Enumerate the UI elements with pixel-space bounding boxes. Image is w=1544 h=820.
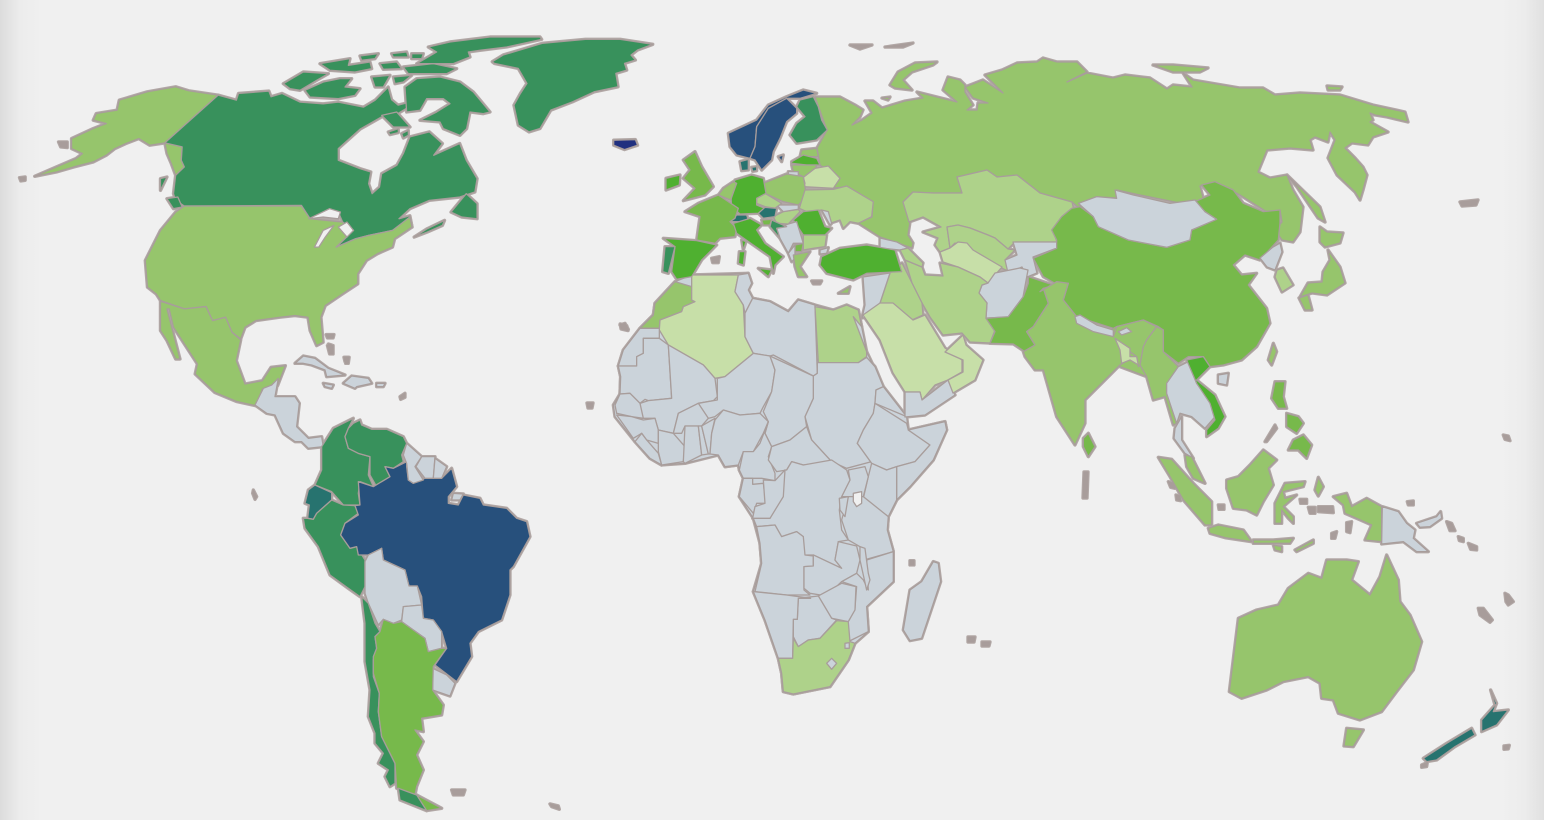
Mongolia <box>1078 190 1217 247</box>
Central America <box>255 378 323 448</box>
Belarus <box>803 166 840 188</box>
Venezuela <box>345 420 407 487</box>
New Siberian Islands <box>1327 86 1342 90</box>
Alaska panhandle <box>165 143 184 175</box>
Brazil <box>341 462 530 682</box>
United Kingdom <box>683 152 713 201</box>
small islands: Canaries, Comoros <box>620 323 914 565</box>
Albania <box>788 245 795 262</box>
Georgia and Armenia <box>880 238 908 250</box>
Greece <box>793 252 810 277</box>
region: europe <box>663 90 902 293</box>
France <box>685 195 738 243</box>
Egypt <box>815 305 867 363</box>
Canada: Atlantic and Pacific islands <box>160 177 477 237</box>
Austria <box>758 207 777 218</box>
Cuba <box>295 356 345 377</box>
Yemen <box>905 380 955 417</box>
Kaliningrad <box>788 172 798 176</box>
Norway <box>728 90 817 158</box>
South Africa <box>778 621 855 694</box>
Sicily <box>758 268 772 277</box>
Morocco <box>640 282 695 328</box>
Syria and Jordan <box>862 273 890 318</box>
Uzbekistan <box>947 225 1015 272</box>
Bhutan <box>1118 328 1132 335</box>
Crete <box>812 281 822 284</box>
Romania <box>793 210 832 235</box>
Halmahera <box>1315 477 1323 496</box>
Turkey <box>820 245 902 280</box>
Latvia <box>792 155 820 165</box>
Lithuania <box>792 165 817 177</box>
Tasmania <box>1344 728 1363 747</box>
Lesotho <box>827 658 837 669</box>
Chile <box>362 597 395 787</box>
Madagascar <box>903 562 941 641</box>
Slovenia <box>762 219 772 225</box>
Ukraine <box>799 186 873 228</box>
Canadian Arctic archipelago <box>283 37 542 138</box>
South Asia base <box>1110 323 1167 377</box>
Greenland <box>492 39 653 132</box>
Afghanistan <box>979 268 1028 318</box>
Lesser Sunda islands <box>1253 538 1293 543</box>
Algeria <box>659 275 753 378</box>
Colombia <box>315 418 373 505</box>
Indonesian New Guinea <box>1333 493 1382 542</box>
Myanmar <box>1140 327 1178 425</box>
Canada <box>165 87 477 247</box>
Alaska <box>35 87 218 176</box>
Hispaniola <box>343 376 372 388</box>
Malaysia peninsula <box>1185 455 1205 483</box>
region: africa <box>613 273 947 694</box>
Libya <box>745 298 817 376</box>
Tunisia <box>735 273 753 313</box>
region: russia and northern asia <box>815 58 1408 417</box>
Switzerland <box>730 215 748 222</box>
Balearics <box>712 257 719 263</box>
India <box>1023 282 1157 445</box>
Great Lakes <box>309 209 353 247</box>
Portugal <box>663 247 675 273</box>
Poland <box>763 174 807 205</box>
region: south-east asia and oceania <box>1158 382 1513 767</box>
Sakhalin <box>1287 175 1325 222</box>
Bangladesh <box>1115 338 1138 365</box>
Africa landmass base <box>613 273 947 694</box>
Iran <box>905 260 995 343</box>
region: north america <box>20 39 653 406</box>
Kolguev <box>882 97 890 100</box>
Pakistan <box>986 277 1055 352</box>
scattered islands: Svalbard, Arctic, Indian Ocean, Atlantic <box>587 43 1478 646</box>
Estonia <box>800 148 818 157</box>
small Pacific islands <box>1168 425 1513 767</box>
Central and Southern Africa <box>739 460 893 658</box>
Bosnia and Serbia <box>777 222 803 253</box>
Sulawesi <box>1275 482 1305 523</box>
Croatia <box>770 220 787 238</box>
China <box>1033 182 1280 367</box>
Sweden <box>750 98 797 170</box>
Papua New Guinea <box>1382 507 1428 552</box>
Taiwan <box>1268 343 1277 365</box>
Guianas <box>403 443 463 500</box>
Saudi Arabia <box>863 303 962 400</box>
Novaya Zemlya <box>890 62 937 90</box>
Hungary <box>773 209 800 224</box>
Peru <box>303 500 365 597</box>
Gotland <box>778 155 783 162</box>
Sardinia <box>738 252 745 265</box>
Paraguay <box>402 605 442 652</box>
Slovakia <box>777 205 798 212</box>
region: central and south america <box>253 344 559 811</box>
Borneo <box>1227 450 1277 515</box>
Bolivia <box>365 548 422 625</box>
small islands: Falklands, Galapagos, South Georgia <box>253 344 559 809</box>
Tierra del Fuego <box>398 788 427 811</box>
Moldova <box>822 210 832 225</box>
Argentina <box>373 619 447 795</box>
Thailand, Laos, Cambodia <box>1167 362 1215 428</box>
Thrace <box>820 248 828 254</box>
Germany <box>731 175 766 214</box>
Russia <box>815 58 1408 248</box>
Spain <box>663 238 717 279</box>
Nepal <box>1075 315 1113 337</box>
Netherlands and Belgium <box>718 182 737 200</box>
Australia <box>1229 555 1422 720</box>
New Zealand <box>1482 690 1508 732</box>
Puerto Rico <box>377 383 385 387</box>
Kyrgyzstan and Tajikistan <box>1005 242 1057 277</box>
Corsica <box>742 240 746 250</box>
New Britain <box>1417 512 1442 527</box>
Cyprus <box>838 287 850 293</box>
Denmark <box>740 159 748 171</box>
Thai peninsula <box>1174 417 1193 458</box>
Swaziland <box>845 643 849 648</box>
Czech Republic <box>757 193 782 208</box>
Macedonia <box>795 243 803 252</box>
East and Horn of Africa <box>842 387 947 517</box>
Oman and UAE <box>945 335 983 393</box>
Sumatra <box>1158 457 1212 525</box>
Italy <box>733 218 783 273</box>
region: south and east asia <box>986 182 1280 457</box>
Severnaya Zemlya <box>1153 65 1208 72</box>
South Korea <box>1275 268 1293 292</box>
Azerbaijan <box>900 248 923 267</box>
North Korea <box>1260 243 1282 270</box>
Sudan <box>805 357 883 468</box>
United States <box>145 206 412 346</box>
Ireland <box>666 175 680 190</box>
small islands: Aleutians, Bahamas <box>20 142 628 363</box>
West Africa countries <box>615 328 832 481</box>
Philippines <box>1272 382 1312 458</box>
Lake Victoria <box>853 492 862 507</box>
Hainan <box>1218 373 1228 385</box>
Jamaica <box>323 383 333 388</box>
Ecuador <box>305 485 332 519</box>
Iraq <box>880 263 923 320</box>
Turkmenistan <box>940 242 1002 283</box>
Mexico <box>160 301 285 406</box>
Kazakhstan <box>903 170 1075 252</box>
Vietnam <box>1187 357 1225 437</box>
Uruguay <box>433 668 455 696</box>
Iceland <box>614 140 638 150</box>
Java <box>1208 525 1252 542</box>
Finland <box>790 97 827 143</box>
Japan <box>1299 227 1345 310</box>
Sri Lanka <box>1083 433 1095 457</box>
Bulgaria <box>803 235 827 250</box>
